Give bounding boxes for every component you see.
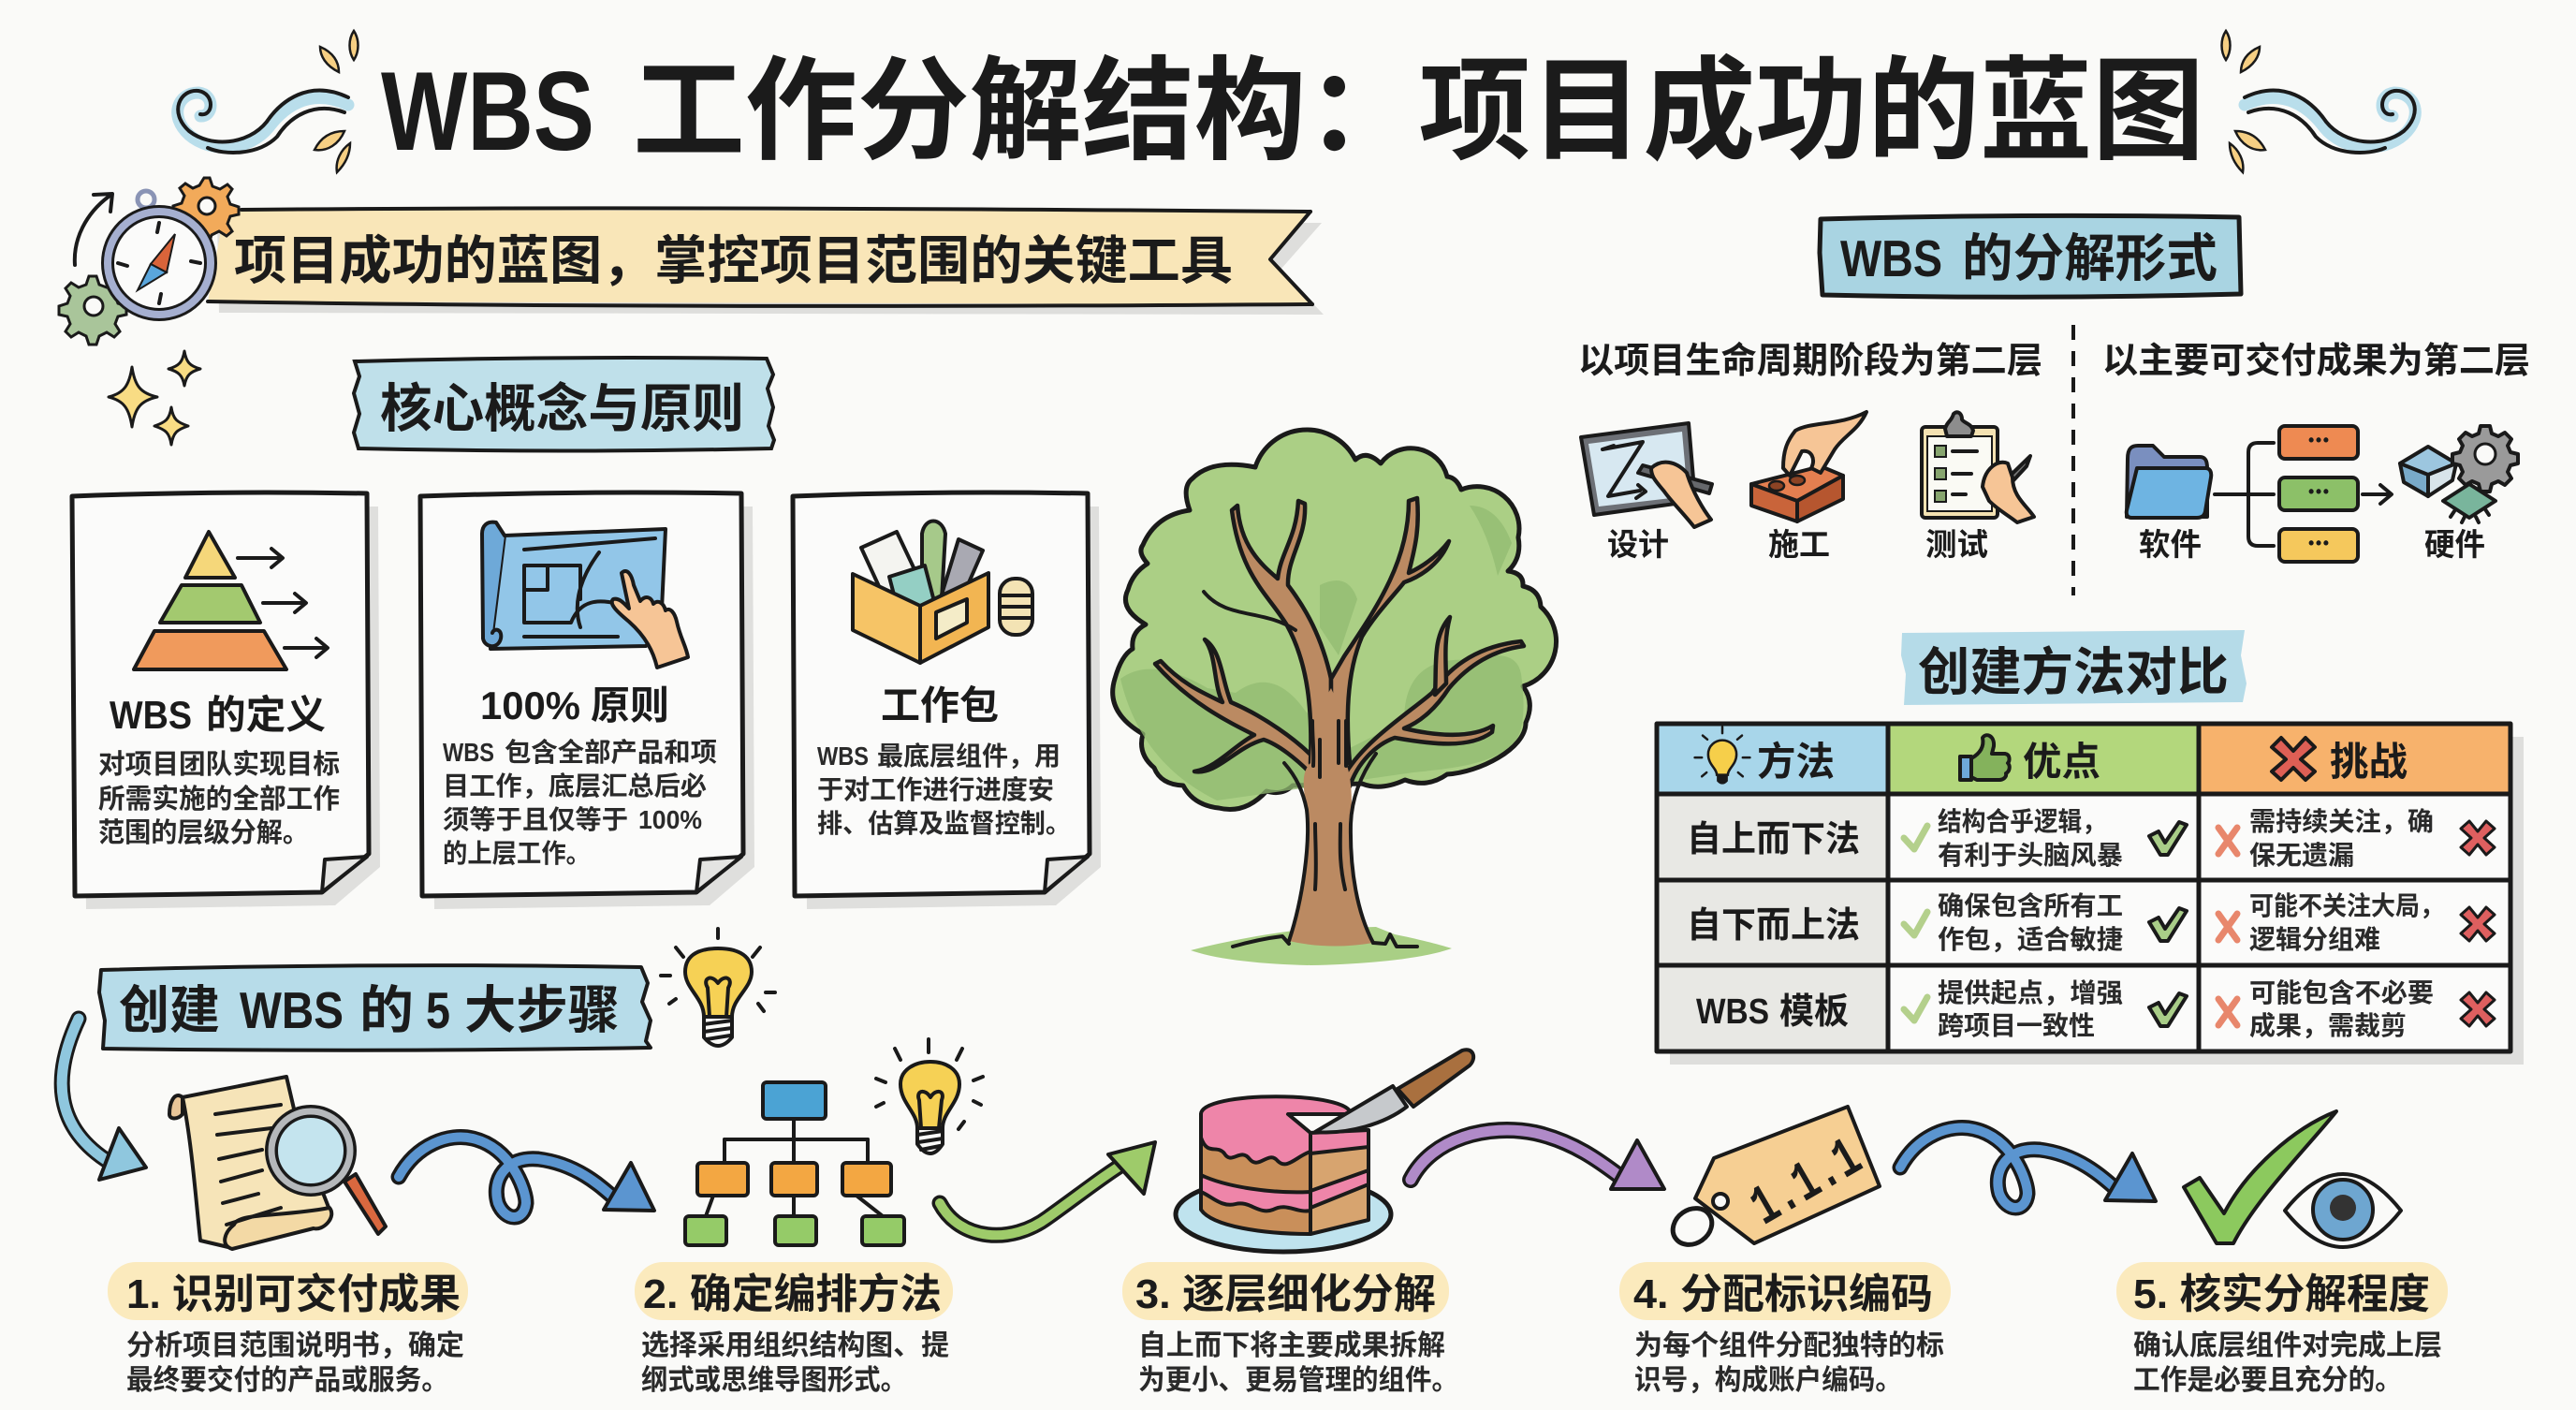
card body text: [443, 738, 717, 868]
step description: 最终要交付的产品或服务。: [126, 1365, 448, 1396]
row: bottom-up: 逻辑分组难: [2249, 925, 2380, 954]
card body text: 于对工作进行进度安: [817, 775, 1054, 804]
row: template: 模板: [1779, 992, 1849, 1032]
label: software: 软件: [2139, 527, 2202, 562]
table header row: 方法: [1757, 740, 1835, 784]
row: bottom-up: 确保包含所有工: [1938, 891, 2123, 920]
card body text: WBS: [443, 738, 494, 767]
heading: 5 steps tag: WBS: [240, 981, 344, 1039]
row: bottom-up: 作包，适合敏捷: [1938, 925, 2123, 954]
step title: 3. 逐层细化分解: [1135, 1271, 1436, 1317]
step description: [126, 1330, 464, 1396]
row: top-down: 结构合乎逻辑，: [1938, 807, 2106, 836]
step description: 分析项目范围说明书，确定: [126, 1330, 464, 1361]
card body text: 对项目团队实现目标: [98, 749, 340, 780]
title: WBS: [381, 49, 594, 174]
heading: 5 steps tag: 创建: [119, 981, 220, 1039]
card heading: WBS: [110, 693, 192, 737]
row: template: 可能包含不必要: [2249, 978, 2434, 1007]
icon: compass with gears: [59, 178, 239, 345]
step description: 自上而下将主要成果拆解: [1138, 1330, 1445, 1361]
icon: check mark and eye: [2184, 1111, 2401, 1247]
step description: [2133, 1330, 2442, 1396]
table header row: 优点: [2023, 740, 2100, 784]
heading: core concepts tag: [354, 358, 774, 451]
label: test: 测试: [1925, 527, 1988, 562]
subtitle text: 项目成功的蓝图，掌控项目范围的关键工具: [234, 231, 1233, 290]
icon: cake and knife: [1176, 1050, 1473, 1252]
step description: 纲式或思维导图形式。: [641, 1365, 907, 1396]
step description: 为每个组件分配独特的标: [1634, 1330, 1944, 1361]
heading: method comparison tag: 创建方法对比: [1918, 643, 2229, 701]
arrow: step 2 to 3: [940, 1142, 1155, 1235]
subheading: deliverables: 以主要可交付成果为第二层: [2102, 342, 2530, 381]
heading: 5 steps tag: 大步骤: [464, 981, 620, 1039]
card body text: 包含全部产品和项: [505, 738, 717, 767]
step description: [1634, 1330, 1944, 1396]
icon: test clipboard: [1922, 412, 2034, 522]
row: bottom-up: 可能不关注大局，: [2249, 891, 2444, 920]
card body text: [98, 749, 340, 848]
step 5: [2116, 1111, 2448, 1396]
row: bottom-up: [1687, 891, 2495, 954]
row: top-down: 有利于头脑风暴: [1938, 841, 2123, 870]
card heading: 原则: [591, 683, 669, 727]
icon: blueprint with hand: [482, 522, 688, 668]
step title: 4. 分配标识编码: [1633, 1271, 1933, 1317]
label: hardware: 硬件: [2424, 527, 2485, 562]
step description: 选择采用组织结构图、提: [641, 1330, 949, 1361]
row: template: WBS: [1696, 992, 1769, 1032]
row: bottom-up: 自下而上法: [1687, 906, 1860, 946]
card body text: 目工作，底层汇总后必: [443, 771, 707, 800]
row: template: [1696, 978, 2495, 1040]
row: top-down: 保无遗漏: [2249, 841, 2354, 870]
step description: 确认底层组件对完成上层: [2133, 1330, 2442, 1361]
heading: 5 steps tag: 5: [426, 981, 450, 1039]
heading: decomposition forms tag: 的分解形式: [1962, 229, 2217, 287]
icon: label tag 1.1.1: 1.1.1: [1740, 1127, 1874, 1241]
step title: 5. 核实分解程度: [2133, 1271, 2430, 1317]
card body text: 须等于且仅等于: [443, 805, 628, 834]
card body text: 的上层工作。: [443, 839, 591, 868]
step description: 工作是必要且充分的。: [2133, 1365, 2402, 1396]
card heading: 工作包: [881, 683, 999, 727]
row: template: 跨项目一致性: [1938, 1011, 2095, 1040]
heading: core concepts tag: 核心概念与原则: [380, 379, 744, 438]
icon: light bulb near heading: [661, 929, 775, 1046]
row: top-down: 自上而下法: [1687, 820, 1860, 859]
step title: [2116, 1262, 2448, 1320]
panel: work package card: [793, 492, 1101, 909]
comparison table: [1657, 724, 2524, 1065]
step description: 识号，构成账户编码。: [1634, 1365, 1902, 1396]
icon: header bulb: [1695, 727, 1749, 785]
table header row: 挑战: [2330, 740, 2408, 784]
row: template: 提供起点，增强: [1938, 978, 2123, 1007]
row: template: 成果，需裁剪: [2249, 1011, 2407, 1040]
arrow: from steps heading: [62, 1019, 146, 1180]
label: design: 设计: [1607, 527, 1669, 562]
heading: decomposition forms tag: WBS: [1840, 229, 1942, 287]
icon: folder and tree to hardware: •••: [2308, 534, 2329, 552]
step title: 1. 识别可交付成果: [126, 1271, 461, 1317]
icon: design tablet: [1581, 423, 1712, 527]
arrow: step 4 to 5: [1900, 1128, 2156, 1208]
step 2: [635, 1039, 983, 1396]
step description: [1138, 1330, 1458, 1396]
icon: folder and tree to hardware: •••: [2308, 482, 2329, 501]
heading: decomposition forms tag: [1820, 215, 2241, 297]
arrow: step 1 to 2: [399, 1138, 654, 1217]
table header row: [1657, 724, 2510, 794]
card body text: 100%: [638, 805, 702, 834]
card heading: 的定义: [206, 693, 326, 737]
card body text: [817, 742, 1071, 838]
banner: subtitle ribbon: [208, 208, 1324, 315]
card body text: 排、估算及监督控制。: [817, 809, 1071, 838]
heading: 5 steps tag: 的: [359, 981, 414, 1039]
step title: [1619, 1262, 1951, 1320]
icon: left swirl: [178, 31, 358, 172]
icon: box with documents and coins: [853, 521, 1032, 663]
branches: [1155, 498, 1524, 786]
icon: construction brick: [1751, 412, 1866, 521]
row: top-down: 需持续关注，确: [2249, 807, 2434, 836]
arrow: step 3 to 4: [1411, 1130, 1664, 1189]
card body text: 最底层组件，用: [877, 742, 1061, 771]
subheading: lifecycle: 以项目生命周期阶段为第二层: [1578, 342, 2042, 381]
title: 工作分解结构：项目成功的蓝图: [633, 49, 2204, 174]
card body text: 范围的层级分解。: [98, 817, 309, 848]
panel: WBS definition card: [72, 492, 380, 909]
icon: org chart: [685, 1082, 904, 1245]
icon: scroll with magnifier: [169, 1077, 386, 1249]
crown: [1113, 430, 1557, 810]
step title: 2. 确定编排方法: [643, 1271, 942, 1317]
panel: 100% rule card: [420, 492, 754, 909]
row: top-down: [1687, 807, 2495, 870]
step description: [641, 1330, 949, 1396]
card body text: WBS: [817, 742, 869, 771]
icon: cross: [2272, 738, 2315, 780]
heading: method comparison tag: [1901, 630, 2247, 705]
icon: thumbs up: [1960, 735, 2010, 780]
icon: tree: [1113, 430, 1557, 965]
ground: [1191, 927, 1452, 965]
card body text: 所需实施的全部工作: [98, 784, 340, 815]
icon: light bulb: [876, 1039, 983, 1153]
step description: 为更小、更易管理的组件。: [1138, 1365, 1458, 1396]
icon: folder and tree to hardware: •••: [2308, 431, 2329, 449]
icon: right swirl: [2222, 31, 2415, 172]
card heading: 100%: [480, 683, 580, 727]
step 3: [1122, 1050, 1473, 1396]
icon: folder and tree to hardware: [2127, 426, 2518, 562]
icon: sparkles: [109, 351, 200, 445]
trunk: [1289, 688, 1373, 947]
icon: label tag 1.1.1: [1666, 1107, 1880, 1252]
step 1: [108, 1077, 468, 1396]
label: construction: 施工: [1768, 527, 1830, 562]
icon: pyramid with arrows: [134, 532, 328, 669]
step 4: [1619, 1107, 1951, 1396]
heading: 5 steps tag: [99, 965, 651, 1050]
